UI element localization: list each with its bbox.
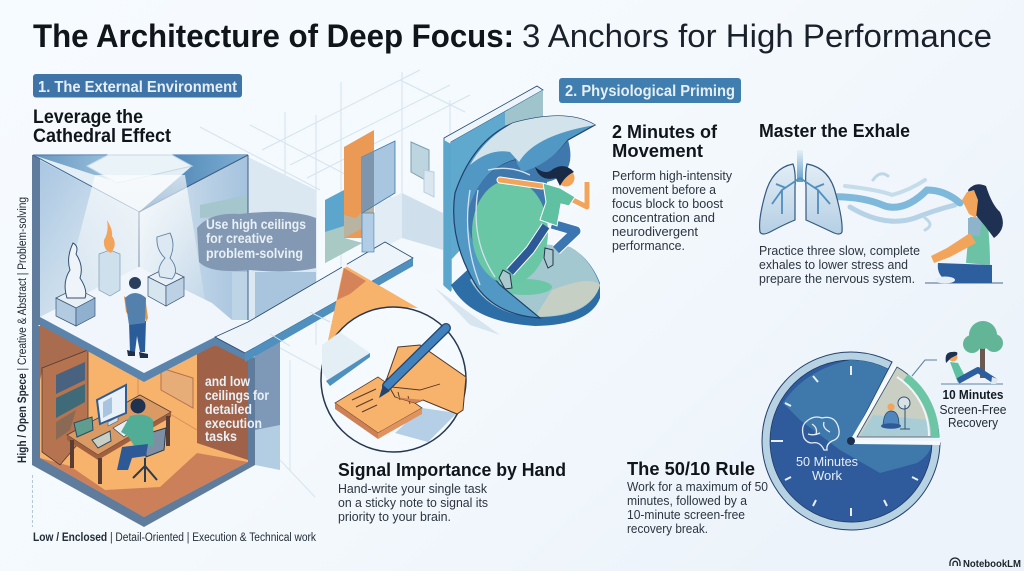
callout: low ceilings: detailed bbox=[205, 401, 252, 417]
walkway bridge bbox=[215, 242, 413, 362]
heading: master the exhale: Master the Exhale bbox=[759, 121, 910, 141]
clock ticks bbox=[771, 366, 918, 516]
wall map bbox=[161, 368, 193, 408]
clock chart: 50 minutes work: 50 Minutes bbox=[796, 454, 858, 469]
heading: leverage the cathedral effect: Cathedral Effect bbox=[33, 126, 172, 147]
wave interior bbox=[467, 140, 570, 285]
heading and text: 50/10 rule: The 50/10 Rule bbox=[627, 459, 755, 479]
title: 3 Anchors for High Performance bbox=[522, 18, 992, 54]
skylight bbox=[87, 155, 192, 183]
heading and text: signal importance: on a sticky note to signal its bbox=[338, 496, 488, 510]
heading and text: 50/10 rule: minutes, followed by a bbox=[627, 494, 747, 508]
walls bbox=[40, 160, 139, 317]
heading: leverage the cathedral effect bbox=[33, 107, 172, 147]
desk bbox=[67, 395, 171, 484]
title: The Architecture of Deep Focus: bbox=[33, 18, 514, 54]
heading and text: 2 minutes of movement: Perform high-intensity bbox=[612, 169, 733, 183]
ceiling bbox=[33, 155, 248, 212]
section badge 2: 2. Physiological Priming bbox=[565, 83, 735, 100]
ghost wall panels bbox=[248, 157, 443, 322]
callout: low ceilings: tasks bbox=[205, 428, 237, 444]
callout: low ceilings: execution bbox=[205, 415, 262, 431]
label: 10 minutes screen-free recovery bbox=[940, 388, 1007, 430]
heading and text: 2 minutes of movement: Movement bbox=[612, 141, 703, 161]
heading and text: 50/10 rule: 10-minute screen-free bbox=[627, 508, 745, 522]
illustration: wave and runner bbox=[435, 86, 600, 335]
icon: meditating person and tree bbox=[881, 397, 910, 429]
runner bbox=[499, 166, 587, 289]
callout blob: high ceilings: for creative bbox=[206, 230, 273, 246]
clock chart: 50 minutes work bbox=[762, 352, 940, 530]
heading and text: 50/10 rule: recovery break. bbox=[627, 522, 708, 536]
seated worker bbox=[113, 398, 166, 482]
heading and text: 2 minutes of movement: neurodivergent bbox=[612, 225, 699, 239]
background perspective grid bbox=[200, 70, 470, 345]
table shadow bbox=[395, 408, 457, 442]
heading and text: signal importance bbox=[338, 460, 566, 524]
heading and text: 50/10 rule bbox=[627, 459, 768, 536]
pen bbox=[387, 328, 446, 386]
computer monitor bbox=[97, 385, 126, 426]
text: master the exhale body: prepare the nervous system. bbox=[759, 272, 915, 286]
standing visitor bbox=[124, 277, 148, 358]
heading and text: signal importance: Hand-write your single task bbox=[338, 482, 488, 496]
bottom axis label: Low / Enclosed | Detail-Oriented | Execution & Technical work bbox=[33, 532, 316, 544]
flame sculpture on column bbox=[99, 220, 120, 296]
hand writing circle bbox=[321, 307, 466, 452]
label: 10 minutes screen-free recovery: Screen-Free bbox=[940, 403, 1007, 417]
illustration: grey-blue wall strip beside lower room bbox=[255, 340, 330, 497]
heading and text: 2 minutes of movement: movement before a bbox=[612, 183, 716, 197]
heading: leverage the cathedral effect: Leverage the bbox=[33, 107, 143, 128]
hand bbox=[386, 345, 466, 414]
floating glass panels bbox=[325, 130, 434, 263]
section badge 1: 1. The External Environment bbox=[38, 79, 237, 96]
light beams bbox=[60, 175, 205, 310]
illustration: breath streams bbox=[825, 174, 960, 230]
heading and text: 2 minutes of movement: focus block to boost bbox=[612, 197, 724, 211]
wall bbox=[444, 86, 543, 290]
label: 10 minutes screen-free recovery: Recovery bbox=[948, 416, 999, 430]
spotlight beam to hand circle bbox=[327, 262, 418, 345]
text: master the exhale body: Practice three slow, complete bbox=[759, 244, 920, 258]
illustration: upper high-ceiling gallery bbox=[32, 155, 248, 382]
illustration: lungs bbox=[760, 150, 842, 234]
illustration: person resting under tree bbox=[941, 321, 1003, 384]
section badge 1 bbox=[33, 74, 242, 98]
vertical axis label: High / Open Spece | Creative & Abstract | Problem-solving bbox=[17, 197, 29, 463]
illustration: lower low-ceiling room bbox=[32, 322, 255, 527]
heading and text: 50/10 rule: Work for a maximum of 50 bbox=[627, 480, 768, 494]
clock chart: 50 minutes work: Work bbox=[812, 468, 843, 483]
text: master the exhale body bbox=[759, 244, 920, 286]
floor bbox=[40, 267, 248, 373]
connector line to recovery figure bbox=[912, 360, 937, 376]
callout: low ceilings: and low bbox=[205, 373, 250, 389]
heading and text: 2 minutes of movement bbox=[612, 122, 733, 253]
callout: low ceilings: ceilings for bbox=[205, 387, 269, 403]
callout: low ceilings bbox=[205, 373, 269, 444]
label: 10 minutes screen-free recovery: 10 Minutes bbox=[942, 388, 1004, 402]
tablet bbox=[322, 332, 370, 383]
heading and text: 2 minutes of movement: 2 Minutes of bbox=[612, 122, 718, 142]
icon: brain bbox=[803, 417, 839, 450]
callout blob: high ceilings: problem-solving bbox=[206, 245, 303, 261]
platform shadow bbox=[435, 288, 500, 335]
clock wedge: 10 minutes recovery bbox=[857, 367, 939, 437]
heading and text: signal importance: priority to your brain. bbox=[338, 510, 451, 524]
heading and text: signal importance: Signal Importance by Hand bbox=[338, 460, 566, 480]
title bbox=[33, 18, 992, 54]
callout blob: high ceilings: Use high ceilings bbox=[206, 216, 306, 232]
bookshelf bbox=[42, 350, 88, 465]
platform disc bbox=[451, 240, 600, 326]
sticky note bbox=[335, 377, 422, 433]
heading and text: 2 minutes of movement: performance. bbox=[612, 239, 685, 253]
sculpture left on plinth bbox=[56, 243, 95, 326]
text: master the exhale body: exhales to lower stress and bbox=[759, 258, 908, 272]
heading and text: 2 minutes of movement: concentration and bbox=[612, 211, 715, 225]
wave body bbox=[454, 116, 595, 318]
callout blob: high ceilings bbox=[197, 212, 316, 272]
section badge 2 bbox=[559, 78, 741, 103]
illustration: seated woman breathing bbox=[925, 184, 1003, 284]
sculpture right on plinth bbox=[148, 233, 184, 306]
